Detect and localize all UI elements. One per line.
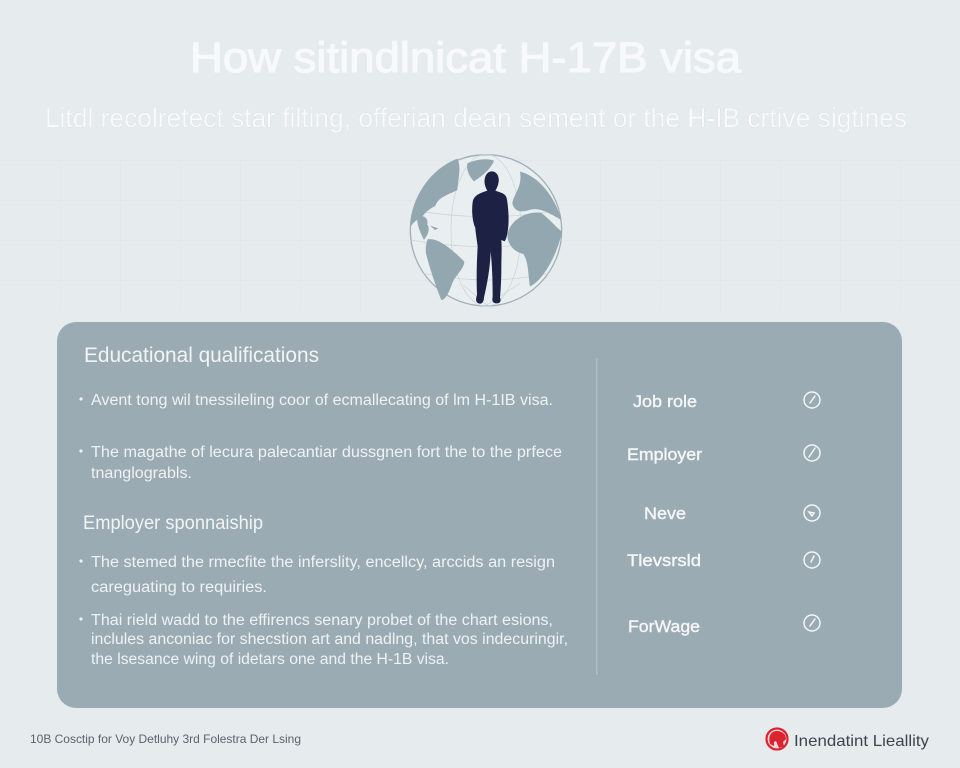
footer note: 10B Cosctip for Voy Detluhy 3rd Folestra Der Lsing	[30, 732, 301, 746]
globe grid lines	[411, 154, 561, 306]
icon: globe with standing figure	[410, 154, 562, 306]
row: forwage: ForWage	[628, 617, 700, 636]
bullet 4: Thai rield wadd to the effirencs senary probet of the chart esions,	[91, 612, 553, 629]
globe disc	[410, 155, 562, 306]
bullet 3: The stemed the rmecfite the inferslity, encellcy, arccids an resign	[91, 554, 555, 571]
row: employer	[627, 445, 820, 464]
row: job role: Job role	[633, 392, 697, 411]
brand logo and name	[766, 728, 929, 750]
icon: red logo	[766, 728, 788, 750]
panel background	[57, 322, 902, 708]
row: tlevsrsld	[627, 551, 820, 570]
row: employer: Employer	[627, 445, 702, 464]
row: job role	[633, 392, 820, 411]
row: forwage	[628, 615, 820, 636]
heading: employer sponsorship: Employer sponnaiship	[83, 512, 263, 534]
row: tlevsrsld: Tlevsrsld	[627, 551, 701, 570]
row: neve: Neve	[644, 504, 686, 523]
brand name: Inendatint Lieallity	[794, 733, 929, 750]
bullet 4: the lsesance wing of idetars one and the H-1B visa.	[91, 651, 449, 668]
bullet 3	[79, 554, 555, 596]
bullet 3: careguating to requiries.	[91, 579, 267, 596]
title: How sitindlnicat H-17B visa	[190, 34, 741, 82]
continents	[411, 159, 562, 300]
subtitle: Litdl recolretect star filting, offerian dean sement or the H-IB crtive sigtines	[45, 103, 907, 133]
bullet 4: inclules anconiac for shecstion art and nadlng, that vos indecuringir,	[91, 631, 568, 648]
bullet 2: tnanglograbls.	[91, 465, 192, 482]
row: neve	[644, 504, 820, 523]
bullet 1: Avent tong wil tnessileling coor of ecmallecating of lm H-1IB visa.	[91, 392, 553, 409]
panel: requirements	[57, 322, 902, 708]
bullet 4	[79, 612, 568, 668]
bullet 2	[79, 444, 562, 482]
figure silhouette	[472, 171, 509, 304]
bullet 2: The magathe of lecura palecantiar dussgnen fort the to the prfece	[91, 444, 562, 461]
heading: educational qualifications: Educational qualifications	[84, 344, 319, 367]
